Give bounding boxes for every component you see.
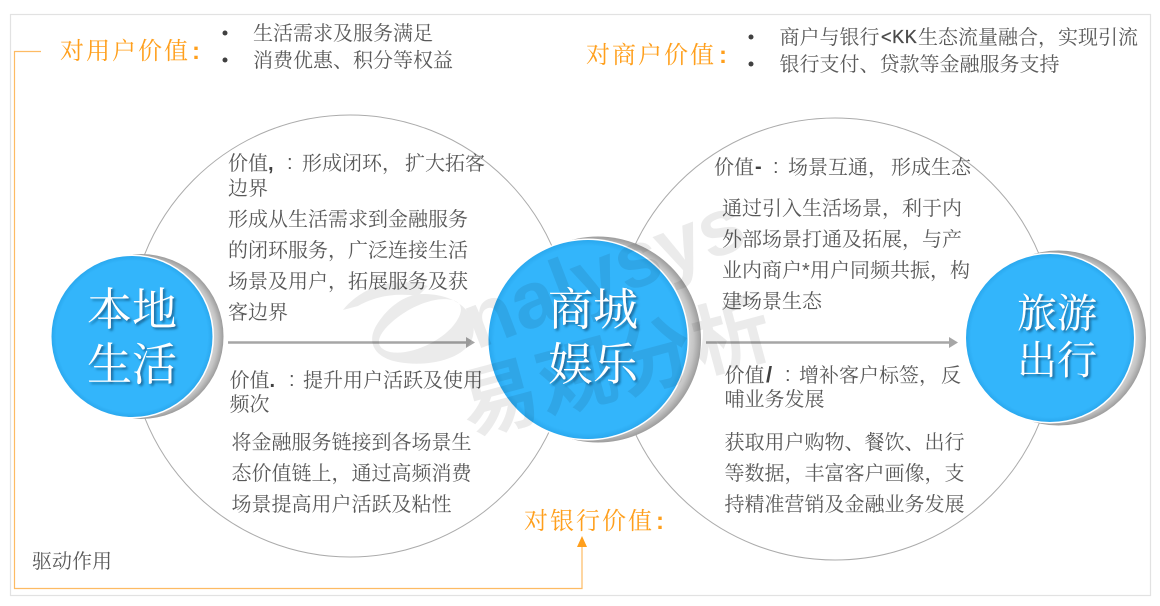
value 4 text: 价值 — [724, 364, 764, 387]
merchant value bullets: 银行支付、贷款等金融服务支持 — [780, 53, 1060, 76]
value 4 text — [724, 362, 964, 516]
value 3 text: 业内商户 — [722, 259, 802, 282]
merchant value bullets: <KK — [881, 27, 917, 47]
value 2 text: 态价值链上，通过高频消费 — [232, 462, 472, 485]
label: mall entertainment — [548, 285, 639, 390]
value 1 text: 场景及用户，拓展服务及获 — [228, 270, 468, 293]
merchant value bullets: 生态流量融合，实现引流 — [918, 26, 1138, 49]
heading: merchant value: 对商户价值 — [586, 42, 716, 69]
user value block — [60, 22, 453, 72]
heading: user value: 对用户价值 — [60, 38, 190, 65]
value 3 text: - — [755, 156, 762, 178]
value 1 text: 价值 — [228, 152, 268, 175]
value 2 text: . — [270, 370, 275, 392]
value 1 text: 形成从生活需求到金融服务 — [228, 208, 468, 231]
label: mall entertainment: 娱乐 — [548, 340, 639, 390]
value 4 text: / — [766, 362, 772, 387]
value 3 text: 形成生态 — [891, 156, 972, 179]
merchant value bullets — [748, 26, 1138, 76]
value 1 text: 形成闭环， — [302, 152, 402, 175]
watermark: nalysys — [450, 178, 756, 366]
value 1 text: , — [268, 153, 274, 175]
value 4 text: 反 — [941, 364, 961, 387]
bubble: local life: 生活 — [87, 340, 177, 390]
value 1 text — [228, 152, 485, 324]
arrow: local life to mall — [228, 337, 475, 348]
value 3 text: : — [773, 156, 779, 178]
value 2 text: : — [289, 369, 295, 391]
value 4 text: : — [785, 364, 791, 386]
value 1 text: 的闭环服务，广泛连接生活 — [228, 239, 468, 262]
user value bullets: 消费优惠、积分等权益 — [253, 49, 453, 72]
value 4 text: 增补客户标签， — [799, 364, 939, 387]
value 2 text — [230, 369, 483, 516]
label: mall entertainment: 商城 — [548, 285, 638, 335]
label: driving effect: 驱动作用 — [32, 550, 112, 573]
value 3 text: 通过引入生活场景，利于内 — [722, 197, 962, 220]
value 3 text: 用户同频共振，构 — [810, 259, 970, 282]
arrow: mall to travel — [706, 337, 958, 348]
value 4 text: 哺业务发展 — [724, 388, 824, 411]
user value bullets — [222, 22, 453, 72]
merchant value bullets: 商户与银行 — [780, 26, 880, 49]
large value circle right — [614, 118, 1056, 560]
bubble: travel — [964, 250, 1146, 426]
heading: bank value: : — [656, 508, 664, 535]
value 1 text: 边界 — [228, 177, 268, 200]
bubble: mall entertainment — [487, 236, 701, 442]
value 1 text: 扩大拓客 — [405, 152, 485, 175]
large value circle left — [129, 115, 571, 557]
value 3 text: 价值 — [714, 156, 754, 179]
value 2 text: 场景提高用户活跃及粘性 — [232, 493, 452, 516]
heading: merchant value: : — [719, 42, 727, 69]
value 1 text: 客边界 — [228, 301, 288, 324]
value 3 text: 外部场景打通及拓展，与产 — [722, 228, 962, 251]
watermark — [343, 178, 783, 451]
driver line: orange bracket with arrow — [14, 52, 587, 588]
value 4 text: 等数据，丰富客户画像，支 — [724, 462, 964, 485]
watermark: 易观分析 — [451, 284, 783, 451]
value 1 text: : — [287, 152, 293, 174]
bubble: travel: 出行 — [1017, 338, 1097, 383]
merchant value block — [586, 26, 1138, 76]
value 2 text: 将金融服务链接到各场景生 — [232, 431, 472, 454]
bubble: travel: 旅游 — [1017, 291, 1097, 336]
value 2 text: 频次 — [230, 393, 270, 416]
bubble: local life: 本地 — [87, 285, 177, 335]
value 2 text: 价值 — [230, 369, 270, 392]
heading: bank value: 对银行价值 — [524, 508, 654, 535]
value 3 text: 场景互通， — [788, 156, 888, 179]
value 2 text: 提升用户活跃及使用 — [303, 369, 483, 392]
heading: user value: : — [192, 38, 200, 65]
value 3 text: 建场景生态 — [722, 290, 823, 313]
bubble: local life — [50, 254, 224, 419]
value 3 text: * — [802, 260, 810, 282]
user value bullets: 生活需求及服务满足 — [253, 22, 433, 45]
value 4 text: 持精准营销及金融业务发展 — [724, 493, 964, 516]
value 3 text — [714, 156, 972, 313]
value 4 text: 获取用户购物、餐饮、出行 — [724, 431, 964, 454]
